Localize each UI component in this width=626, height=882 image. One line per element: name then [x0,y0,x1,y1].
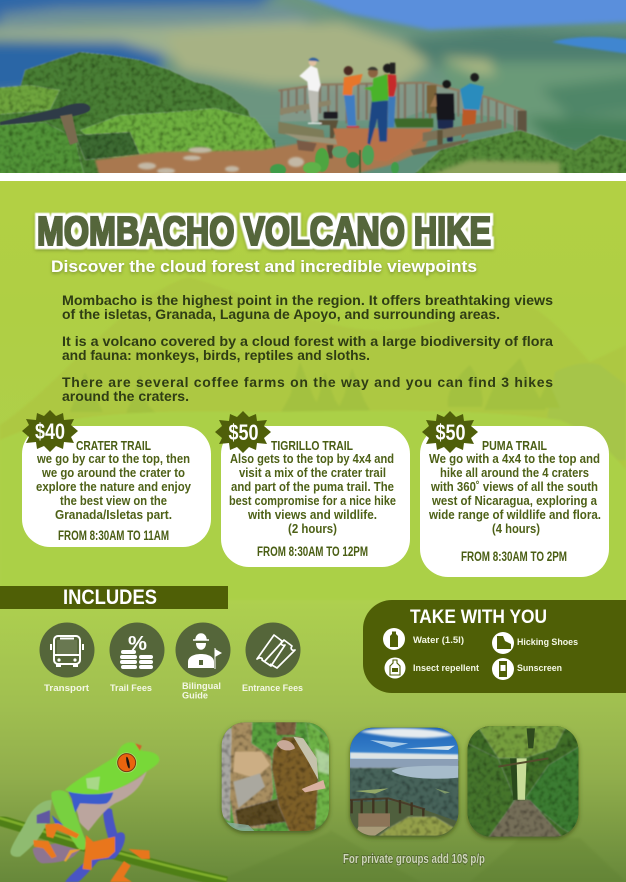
frog [10,742,159,882]
panel: puma trail: west of Nicaragua, exploring a [431,494,598,508]
panel: puma trail: FROM 8:30AM TO 2PM [461,549,567,564]
visitor in red with camera [383,63,397,127]
hero photo: viewpoint over the landscape [0,0,626,178]
panel: puma trail: We go with a 4x4 to the top and [429,452,600,466]
bush left [0,52,280,178]
icon: trail fees: % [128,633,147,655]
panel: crater trail: we go around the crater to [41,466,185,480]
icon: trail fees [110,622,164,678]
panel: tigrillo trail [215,411,410,567]
intro text: around the craters. [62,388,189,404]
panel: puma trail [420,411,609,577]
panel: includes: Trail Fees [110,683,152,694]
panel: tigrillo trail: Also gets to the top by 4x4 and [230,452,394,466]
panel: tigrillo trail: best compromise for a nice hike [229,494,396,508]
panel: tigrillo trail: with views and wildlife. [247,508,377,522]
visitor in black [430,80,455,142]
visitor in white [299,58,322,124]
orange hands and feet [45,823,79,838]
price badge $50 [422,411,478,453]
bilingual guide label [182,681,221,702]
panel: puma trail: PUMA TRAIL [482,438,547,453]
viewpoint fence and visitors [278,58,527,162]
panel: take with you: TAKE WITH YOU [410,606,547,628]
panel: take with you [363,600,626,693]
title: MOMBACHO VOLCANO HIKE [37,208,491,254]
panel: tigrillo trail: FROM 8:30AM TO 12PM [257,544,368,559]
eye [116,752,137,773]
panel: crater trail: FROM 8:30AM TO 11AM [58,528,169,543]
price badge $50: $50 [228,420,258,445]
photo: forest trail [464,723,582,840]
panel: crater trail: CRATER TRAIL [76,438,151,453]
panel: puma trail: hike all around the 4 craters [440,466,589,480]
illustration: red-eyed tree frog on branch [0,742,227,882]
front leg [51,790,86,850]
photo: sloths [218,719,333,834]
visitor in blue [460,73,484,138]
panel: take with you: Sunscreen [517,663,562,674]
far leg [10,800,52,857]
panel: puma trail: (4 hours) [492,522,540,536]
intro text: and fauna: monkeys, birds, reptiles and sloths. [62,347,370,363]
includes heading: INCLUDES [63,586,157,609]
icon: transport bus [40,622,94,678]
panel: includes: Entrance Fees [242,683,303,694]
panel: take with you: Insect repellent [413,663,480,674]
panel: crater trail: we go by car to the top, then [36,452,190,466]
intro text: It is a volcano covered by a cloud forest with a large biodiversity of flora [62,333,553,349]
icon: insect repellent [384,658,406,678]
branch [0,820,227,882]
panel: crater trail: the best view on the [60,494,167,508]
price badge $40: $40 [35,419,65,444]
photo: lake viewpoint [347,728,462,839]
panel: tigrillo trail: visit a mix of the crater trail [239,466,386,480]
icon: entrance tickets [246,622,300,678]
visitor in orange [343,66,363,128]
body [65,742,159,795]
note: private groups: For private groups add 10$ p/p [343,851,485,866]
panel: tigrillo trail: (2 hours) [288,522,337,536]
icon: hiking shoes [492,632,514,654]
panel: crater trail [22,410,211,547]
foreground leaves [270,145,399,176]
price badge $50 [215,411,271,453]
foreground foliage right [415,129,626,173]
panel: puma trail: wide range of wildlife and flora. [428,508,601,522]
panel: tigrillo trail: and part of the puma trail. The [231,480,394,494]
intro text: Mombacho is the highest point in the region. It offers breathtaking views [62,292,553,308]
price badge $40 [22,410,78,452]
arm [68,792,113,813]
bilingual guide label: Bilingual [182,681,221,692]
rear leg [65,808,125,882]
visitor in green [363,67,389,145]
panel: includes [0,586,303,702]
subtitle: Discover the cloud forest and incredible viewpoints [51,258,477,276]
intro text [62,292,553,404]
panel: take with you: Water (1.5l) [413,635,464,646]
bottom background shadows [215,830,626,882]
panel: take with you: Hicking Shoes [517,637,578,648]
icon: sunscreen [492,658,514,680]
panel: tigrillo trail: TIGRILLO TRAIL [271,438,353,453]
intro text: of the isletas, Granada, Laguna de Apoyo, and surrounding areas. [62,306,500,322]
white divider band [0,173,626,181]
includes heading [0,586,228,609]
icon: bilingual guide [176,622,230,678]
icon: water bottle [383,628,405,650]
wooden rail [0,103,90,125]
panel: puma trail: with 360˚ views of all the south [430,480,598,494]
panel: crater trail: explore the nature and enjoy [36,480,191,494]
price badge $50: $50 [436,420,466,445]
belly [72,772,147,831]
background hills and trees [0,277,626,600]
intro text: There are several coffee farms on the way and you can find 3 hikes [62,374,553,390]
bilingual guide label: Guide [182,690,208,702]
ground [94,136,428,173]
panel: includes: Transport [44,683,90,694]
panel: crater trail: Granada/Isletas part. [55,508,172,522]
